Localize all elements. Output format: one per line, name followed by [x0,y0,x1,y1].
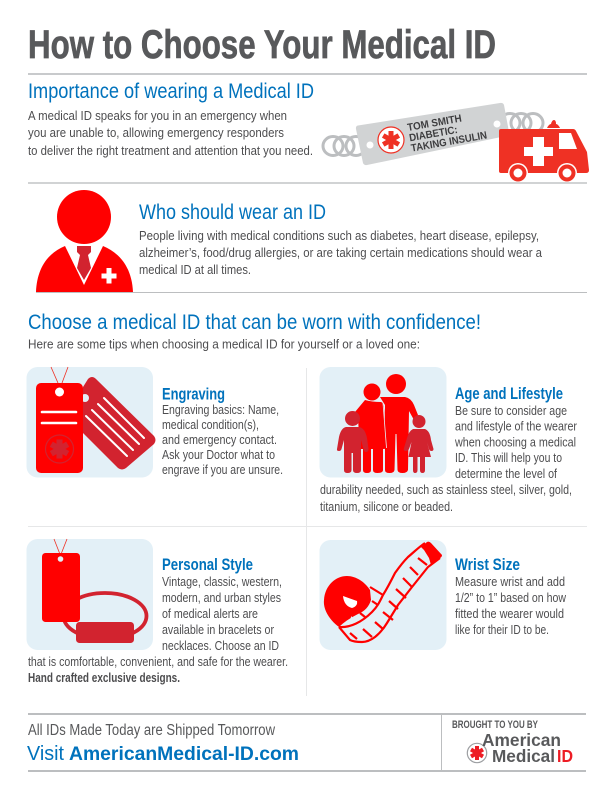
logo: American Medical ID: Medical [492,746,555,766]
icon: ID bracelet plate: TAKING INSULIN [410,129,488,155]
icon: chain links right [500,114,543,132]
text block: wrist size: 1/2” to 1” based on how [455,591,567,605]
panel: wrist size [320,540,567,650]
logo: American Medical ID: ID [557,746,573,766]
panel: personal style [26,539,288,685]
icon: person with medical cross [36,190,133,292]
text block: who should wear: alzheimer’s, food/drug allergies, or are taking certain medications should wear a [139,246,542,260]
icon: pendant tag and bracelet [26,539,153,650]
text block: engraving: Ask your Doctor what to [162,448,275,462]
text block: who should wear [139,229,542,277]
heading: age and lifestyle: Age and Lifestyle [455,384,563,403]
text block: importance [28,109,313,158]
heading: who should wear an ID: Who should wear an ID [139,201,326,224]
title: How to Choose Your Medical ID [28,23,496,67]
text block: personal style: necklaces. Choose an ID [162,639,279,653]
icon: measuring tape [320,540,446,650]
text block: engraving: Engraving basics: Name, [162,403,279,417]
text block: age and lifestyle [320,404,577,514]
heading: choose a medical ID: Choose a medical ID that can be worn with confidence! [28,311,481,334]
text block: age and lifestyle: durability needed, such as stainless steel, silver, gold, [320,483,572,497]
text block: importance: you are unable to, allowing emergency responders [28,126,284,140]
text block: age and lifestyle: Be sure to consider age [455,404,567,418]
icon: ambulance [499,120,589,183]
text block: age and lifestyle: when choosing a medical [454,436,576,450]
panel: who should wear an ID [36,190,542,292]
text: brought to you by: BROUGHT TO YOU BY [452,719,539,731]
text: tips intro: Here are some tips when choosing a medical ID for yourself or a loved one: [28,338,420,352]
text block: engraving: medical condition(s), [162,418,259,432]
panel: engraving [26,367,283,478]
text block: engraving: engrave if you are unsure. [162,463,283,477]
logo: American Medical ID: American [482,730,561,750]
text block: wrist size [455,575,567,637]
text block: who should wear: medical ID at all times. [139,263,251,277]
text block: personal style: that is comfortable, convenient, and safe for the wearer. [28,655,288,669]
text block: wrist size: fitted the wearer would [455,607,564,621]
text: visit website: AmericanMedical-ID.com [69,743,299,765]
text block: importance: to deliver the right treatment and attention that you need. [28,144,313,158]
icon: engraved tags [26,367,156,478]
text block: age and lifestyle: determine the level of [455,467,557,481]
icon: ID bracelet plate: DIABETIC: [408,124,459,144]
heading: personal style: Personal Style [162,555,253,574]
icon: chain links left [323,136,366,156]
text block: age and lifestyle: titanium, silicone or beaded. [320,500,453,514]
text block: personal style: of medical alerts are [162,607,258,621]
panel: age and lifestyle [320,367,577,514]
text block: importance: A medical ID speaks for you in an emergency when [28,109,287,123]
text block: personal style: available in bracelets or [162,623,274,637]
text block: engraving [162,403,283,477]
text block: personal style: Vintage, classic, western, [162,575,282,589]
text block: who should wear: People living with medical conditions such as diabetes, heart disease, epilepsy, [139,229,539,243]
heading: wrist size: Wrist Size [455,555,520,574]
text block: engraving: and emergency contact. [162,433,277,447]
logo: American Medical ID [467,730,573,766]
text block: wrist size: Measure wrist and add [455,575,565,589]
heading: importance: Importance of wearing a Medical ID [28,80,314,103]
text: visit website: Visit [27,742,64,765]
text block: age and lifestyle: ID. This will help you to [455,451,562,465]
text: shipping message: All IDs Made Today are Shipped Tomorrow [28,722,276,739]
panel: importance of wearing a medical ID [28,80,589,183]
text block: personal style: Hand crafted exclusive designs. [28,671,180,685]
icon: ID bracelet plate: TOM SMITH [406,113,463,134]
text block: personal style [28,575,288,685]
panel: footer [27,713,586,772]
icon: family [320,367,446,478]
heading: engraving: Engraving [162,384,225,404]
text block: wrist size: like for their ID to be. [455,623,549,637]
text block: age and lifestyle: and lifestyle of the wearer [455,420,577,434]
icon: ID bracelet plate [356,103,509,165]
text block: personal style: modern, and urban styles [162,591,281,605]
